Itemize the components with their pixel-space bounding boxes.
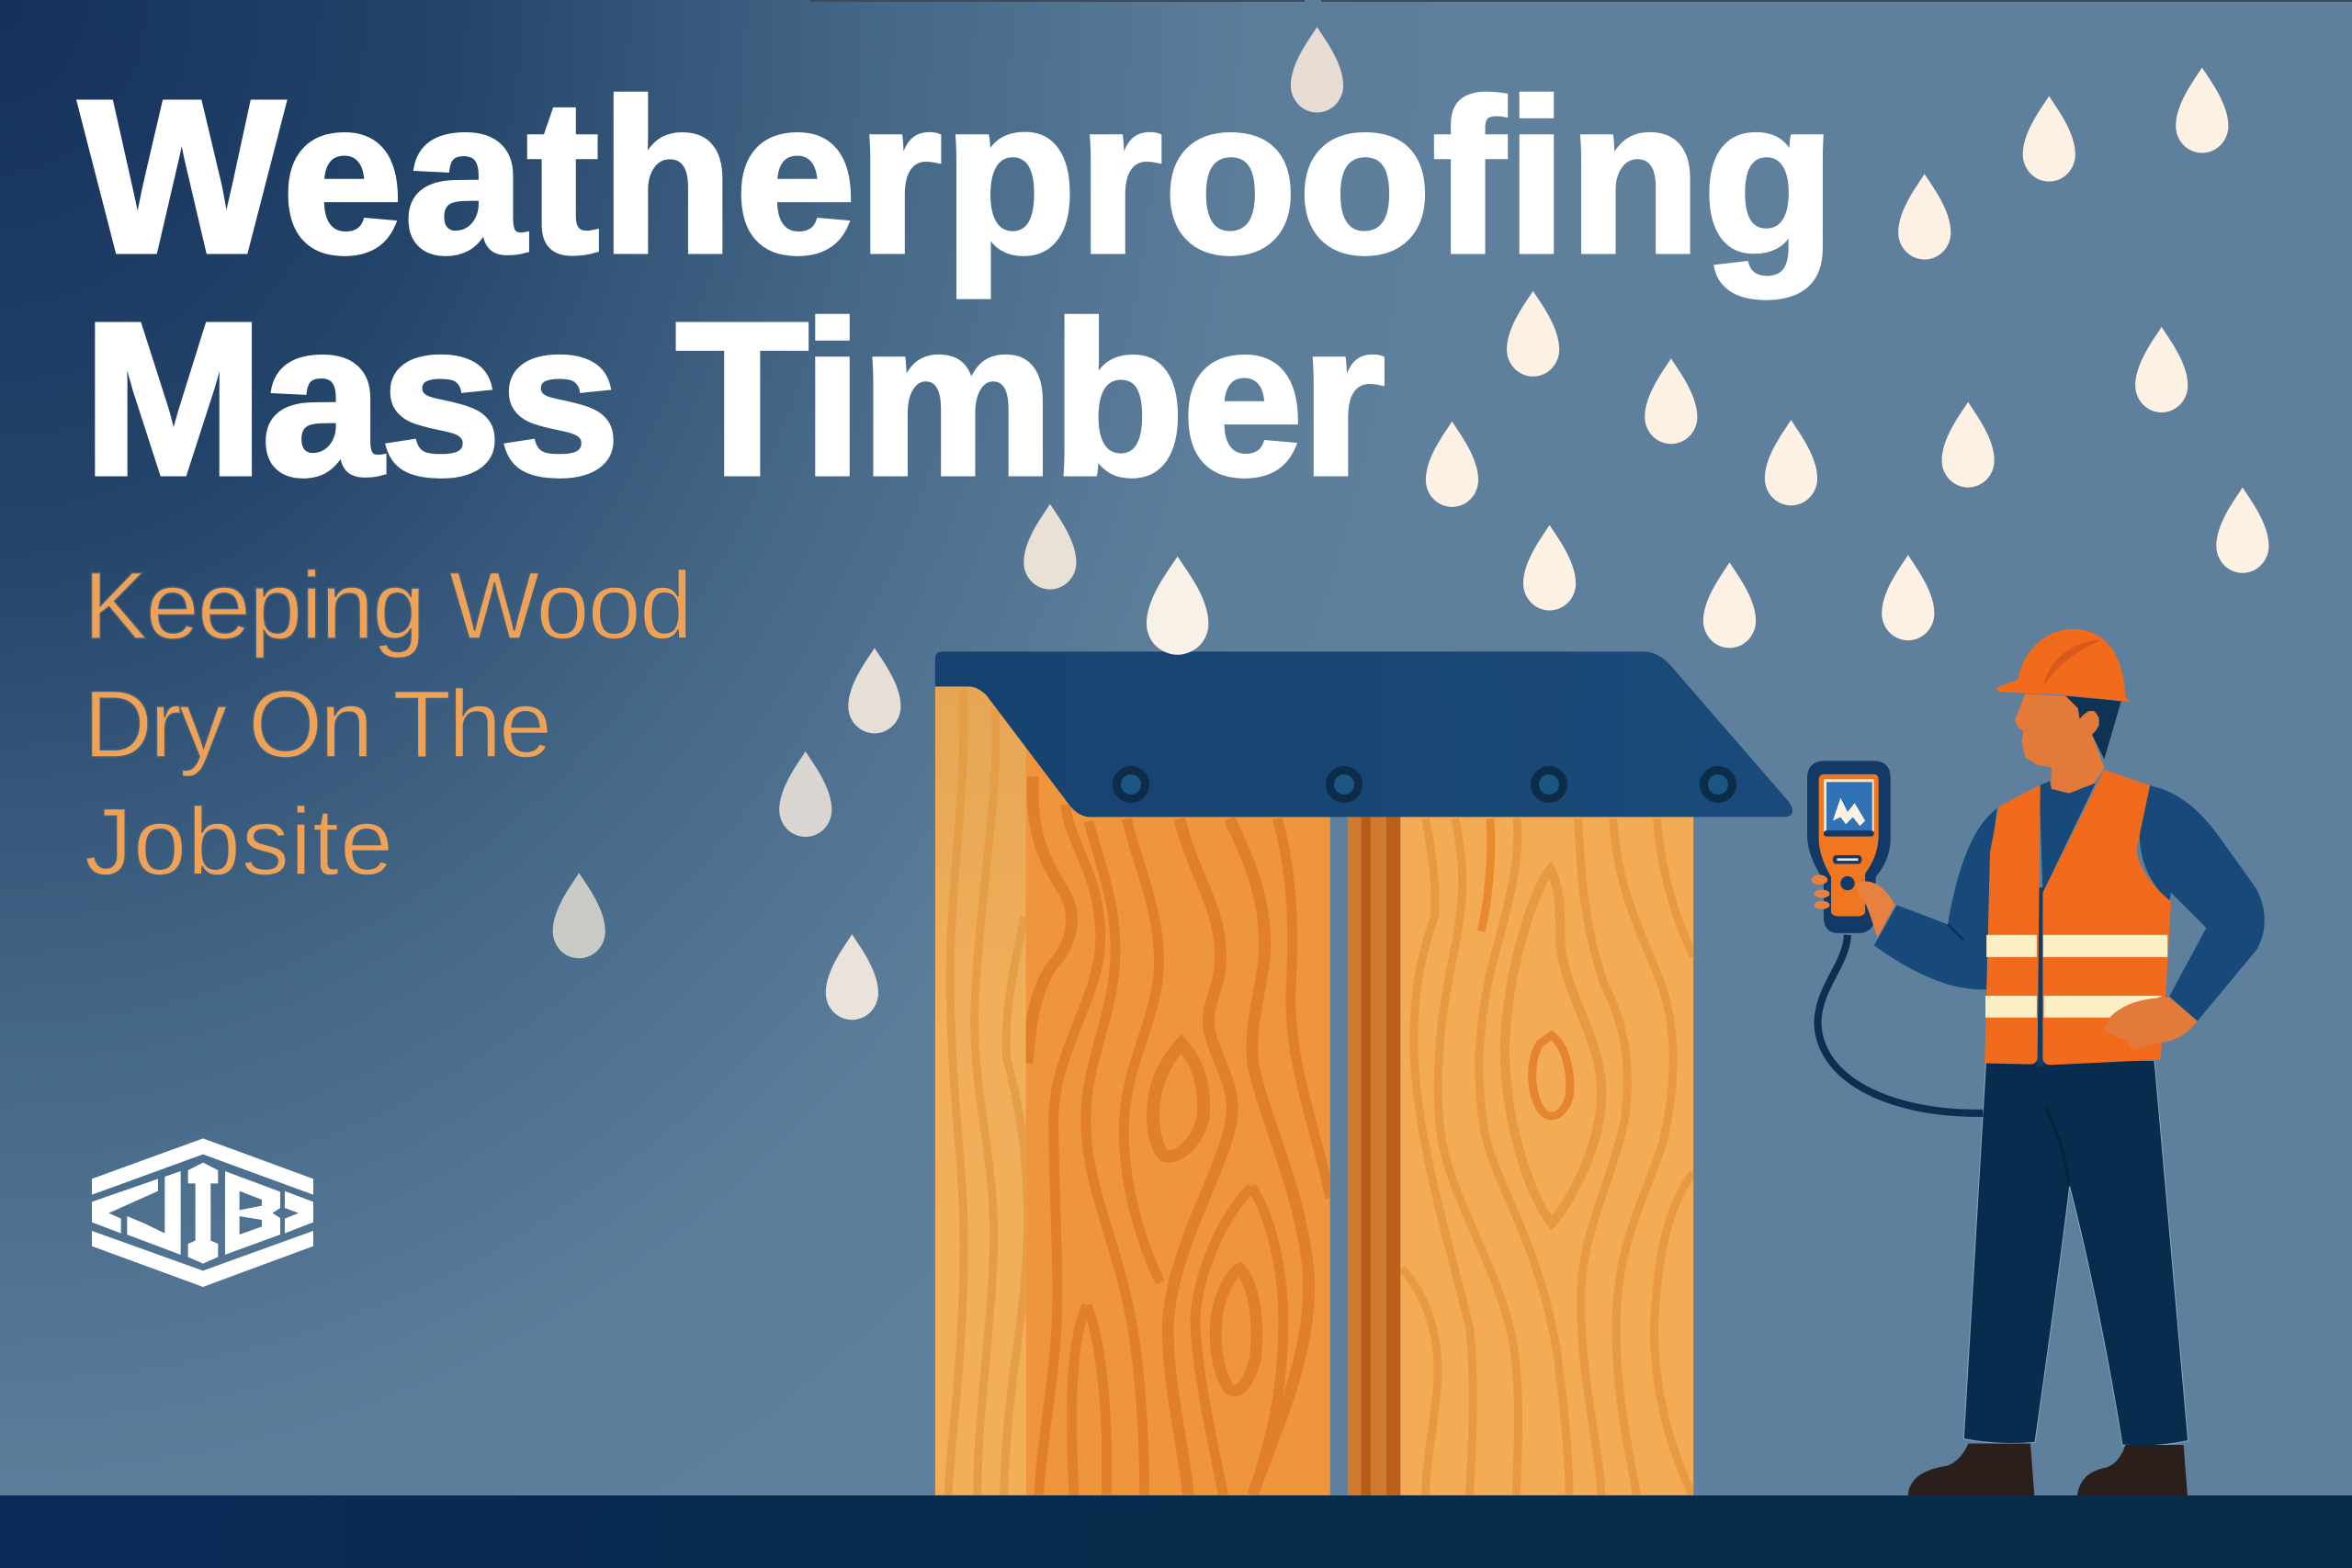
meter label and button (1833, 855, 1861, 890)
meter body (1807, 761, 1891, 933)
ground band (0, 1495, 2352, 1568)
meter screen (1824, 779, 1874, 837)
left lamella (935, 686, 1026, 1495)
title (79, 55, 1836, 521)
wood grain right (1402, 818, 1693, 1495)
title: Mass Timber (83, 277, 1385, 521)
face and neck (2015, 694, 2104, 794)
subtitle: Dry On The (84, 671, 552, 778)
far arm sleeve (2140, 785, 2265, 1021)
trousers (1963, 1060, 2188, 1446)
spine (1348, 737, 1400, 1495)
roof fasteners (1117, 770, 1733, 799)
worker legs and boots (1908, 1060, 2188, 1495)
wood grain middle (1027, 776, 1330, 1495)
subtitle: Keeping Wood (84, 553, 693, 660)
title: Weatherproofing (79, 55, 1836, 299)
meter cable (1817, 935, 1983, 1113)
subtitle: Jobsite (85, 789, 393, 896)
boots (1908, 1443, 2188, 1495)
near arm sleeve (1874, 808, 1997, 989)
worker upper body and moisture meter (1807, 629, 2265, 1113)
raindrops (553, 27, 2268, 1020)
logo: JIB (92, 1138, 313, 1287)
subtitle (84, 553, 693, 896)
wood grain left (948, 689, 1027, 1495)
right lamella (1400, 737, 1693, 1495)
hair (2065, 696, 2121, 759)
holding hand (1812, 874, 1895, 938)
timber panels (935, 651, 1792, 1495)
reflective stripes (1985, 935, 2167, 1018)
shirt collar (2040, 781, 2096, 893)
safety vest (1984, 770, 2171, 1065)
blue roof cap (935, 651, 1792, 817)
middle lamella (1026, 737, 1330, 1495)
meter orange face (1819, 774, 1879, 917)
vest center seam (2037, 887, 2044, 1066)
hip hand (2105, 998, 2198, 1049)
hard hat (1996, 629, 2131, 702)
